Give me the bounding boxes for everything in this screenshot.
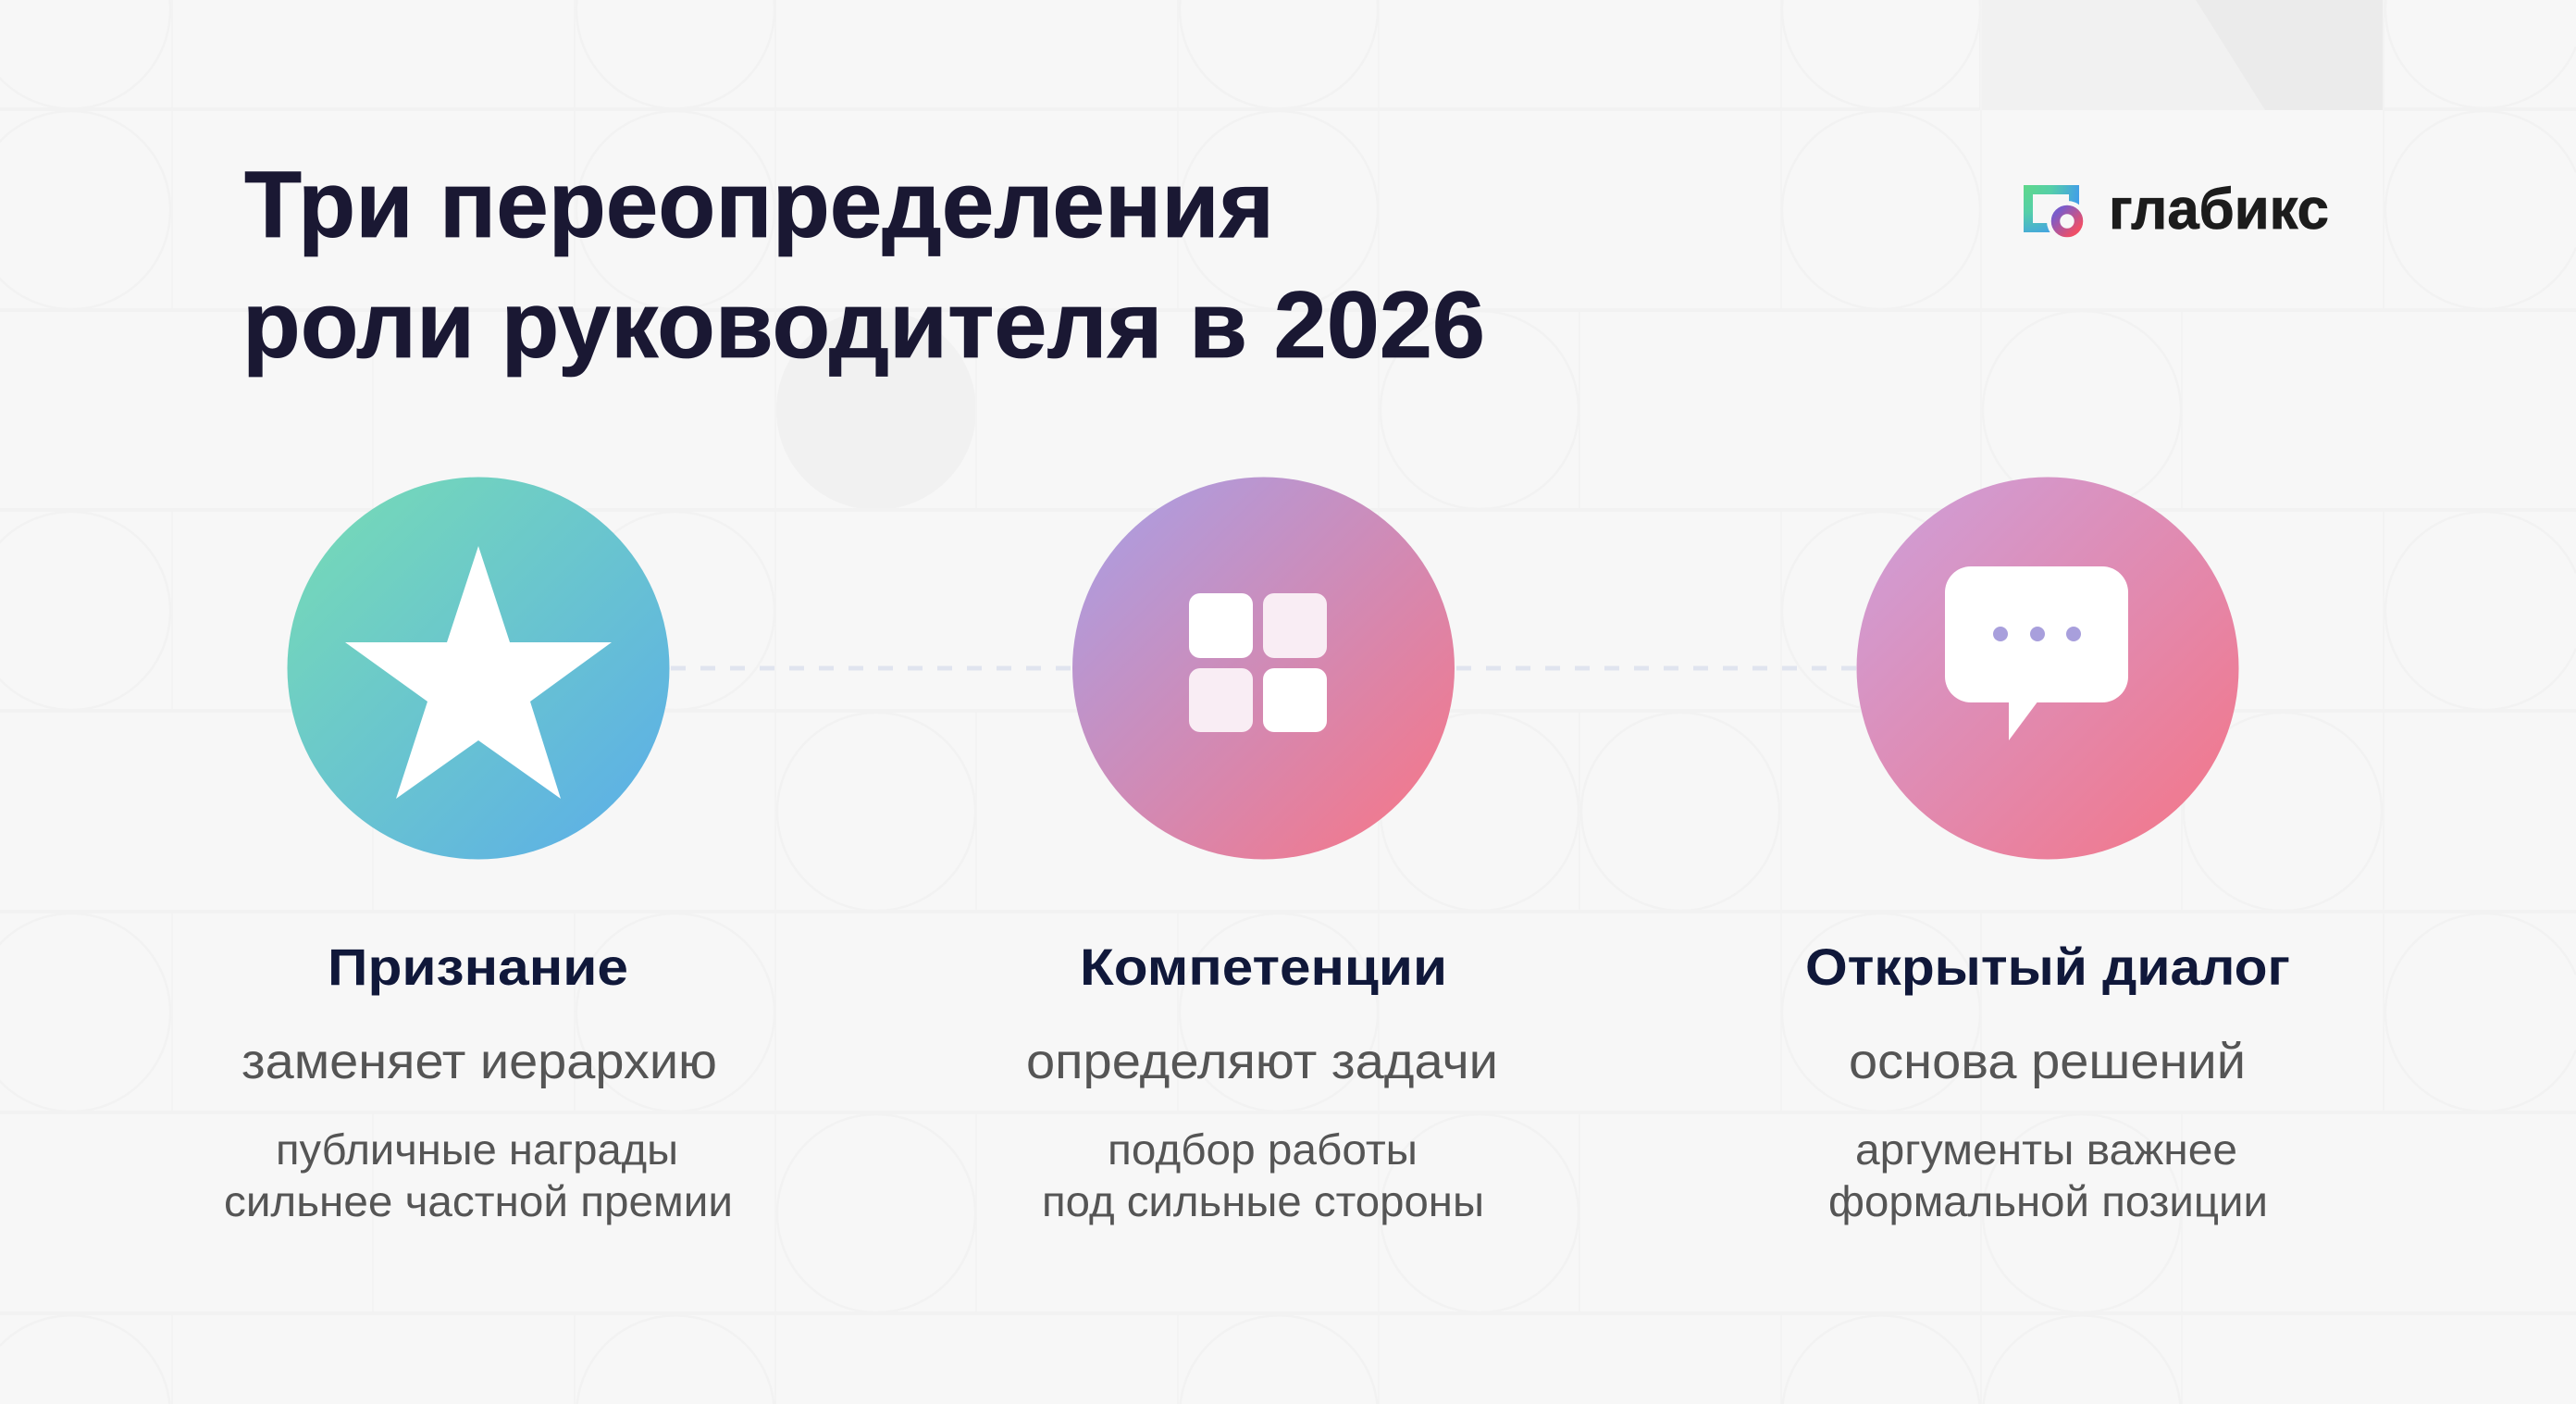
panel: Открытый диалог bbox=[1805, 478, 2290, 1225]
connector: dashed line 1 to 2 bbox=[671, 666, 1073, 670]
icon: star in teal circle bbox=[287, 478, 670, 859]
subtitle: основа решений bbox=[1849, 1034, 2246, 1089]
description: публичные награды bbox=[276, 1125, 678, 1174]
heading: Признание bbox=[328, 938, 628, 996]
title: роли руководителя в 2026 bbox=[242, 272, 1485, 378]
description: под сильные стороны bbox=[1042, 1177, 1484, 1225]
icon: speech bubble in pink circle bbox=[1856, 478, 2239, 859]
panel: Признание bbox=[224, 478, 733, 1225]
logo wordmark: глабикс bbox=[2109, 178, 2329, 242]
description: формальной позиции bbox=[1828, 1177, 2268, 1225]
icon: logo mark bbox=[2024, 185, 2087, 242]
logo: глабикс bbox=[2024, 178, 2329, 242]
heading: Открытый диалог bbox=[1805, 938, 2290, 996]
title: Три переопределения bbox=[244, 152, 1274, 257]
description: подбор работы bbox=[1108, 1125, 1418, 1174]
connector: dashed line 2 to 3 bbox=[1456, 666, 1856, 670]
description bbox=[224, 1125, 733, 1225]
subtitle: определяют задачи bbox=[1026, 1034, 1498, 1089]
description bbox=[1828, 1125, 2268, 1225]
description: аргументы важнее bbox=[1855, 1125, 2237, 1174]
icon: grid in purple-pink circle bbox=[1072, 478, 1455, 859]
subtitle: заменяет иерархию bbox=[242, 1034, 717, 1089]
description bbox=[1042, 1125, 1484, 1225]
description: сильнее частной премии bbox=[224, 1177, 733, 1225]
title bbox=[242, 152, 1485, 378]
heading: Компетенции bbox=[1080, 938, 1447, 996]
panel: Компетенции bbox=[1026, 478, 1498, 1225]
